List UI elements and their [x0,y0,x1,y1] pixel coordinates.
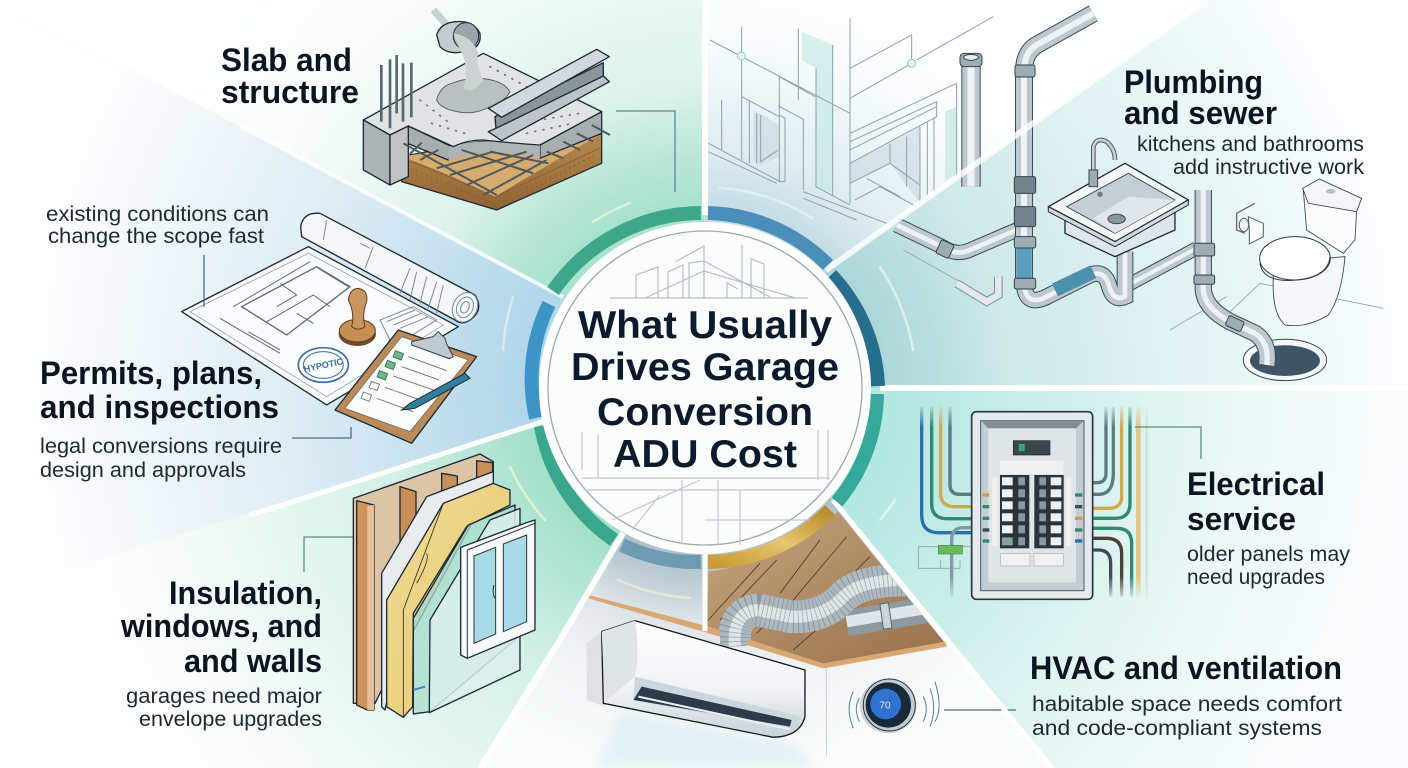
heading: service [1187,501,1296,537]
heading: and walls [184,643,322,679]
caption: existing conditions: change the scope fast [48,225,264,248]
caption: legal conversions [40,435,282,482]
caption: legal conversions: design and approvals [40,459,246,482]
illustration: wall layers and window [353,454,535,717]
leader line [1135,427,1201,459]
leader line: upper [203,255,205,307]
panel: slab and structure [221,10,675,210]
heading: and inspections [40,389,279,425]
leader line [944,709,1016,711]
caption: kitchens and bathrooms [1137,133,1364,156]
heading: Insulation, [169,575,322,611]
caption: habitable space needs comfort [1032,693,1342,716]
caption [1137,133,1365,179]
heading [120,575,322,679]
caption [1032,693,1342,740]
panel: electrical service [918,407,1351,599]
caption [126,685,322,731]
caption: garages need major [126,685,322,708]
heading [221,42,359,110]
illustration: breaker panel and wiring [918,407,1147,599]
panel: insulation, windows and walls [120,454,535,731]
centre hub disc [539,222,871,554]
heading: Permits, plans, [40,355,262,391]
caption: and code-compliant systems [1032,717,1322,740]
heading [1124,64,1277,131]
caption [1187,543,1351,589]
panel: plumbing and sewer [897,13,1383,381]
leader line [304,537,353,572]
heading: Slab and [221,42,352,78]
heading: Electrical [1187,466,1325,502]
caption: add instructive work [1173,156,1365,179]
illustration: pipes, sink and toilet [897,13,1383,381]
heading: HVAC and ventilation [1030,650,1342,686]
heading: windows, and [120,608,322,644]
line art: garage skyline [610,245,808,298]
soft halo arcs around the hub [503,188,913,598]
illustration: architectural line drawing, top centre panel [708,17,993,223]
illustration: plans, stamp and clipboard [182,213,482,443]
illustration: attic duct, mini split and thermostat: 70 [879,700,891,711]
caption: existing conditions [46,203,269,248]
caption: need upgrades [1187,566,1325,589]
title: ADU Cost [613,433,797,476]
leader line [616,111,675,192]
heading [40,355,279,425]
heading: and sewer [1124,95,1277,131]
line art: floor plan [582,430,830,545]
heading: Plumbing [1124,64,1263,100]
leader line: lower [292,427,351,438]
title: Conversion [597,391,813,434]
illustration: concrete slab, rebar and steel beam [363,10,610,210]
illustration: attic duct, mini split and thermostat [587,512,947,767]
caption: envelope upgrades [139,708,322,731]
panel: hvac and ventilation [587,512,1342,767]
title [571,304,839,476]
heading: structure [221,74,359,110]
caption: older panels may [1187,543,1351,566]
illustration: plans, stamp and clipboard: HYPOTIC [303,356,344,374]
title: Drives Garage [571,346,839,389]
caption: legal conversions: legal conversions require [40,435,282,458]
centre hub ring [532,213,878,562]
panel: permits, plans and inspections [40,203,482,482]
heading [1187,466,1325,537]
caption: existing conditions: existing conditions can [46,203,269,226]
title: What Usually [578,304,832,347]
